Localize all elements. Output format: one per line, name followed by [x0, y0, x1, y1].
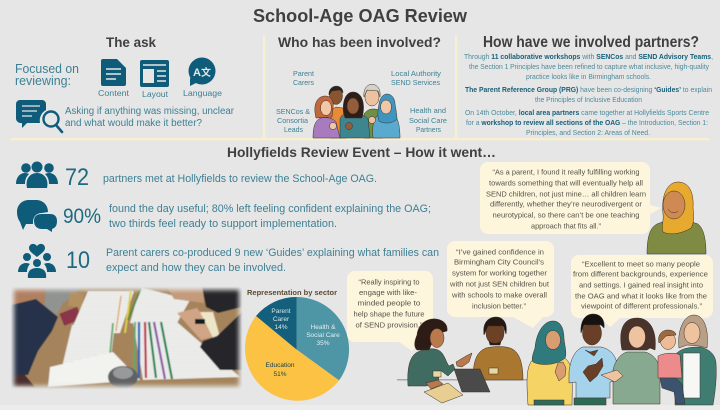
- description: two thirds feel ready to support implementation.: [109, 218, 337, 230]
- slice labels: Parent: [271, 308, 291, 315]
- icon: content: [101, 59, 126, 86]
- partner labels: Leads: [284, 125, 303, 134]
- text: asking: and what would make it better?: [65, 118, 202, 129]
- stat: 90 percent: [17, 200, 431, 232]
- woman teal: [340, 92, 370, 138]
- quote text: towards something that will eventually help all: [489, 178, 643, 188]
- quote text: [449, 248, 549, 310]
- chart: representation by sector pie: [245, 288, 349, 401]
- icon labels: Layout: [142, 90, 169, 99]
- partner labels: SENCos &: [276, 107, 310, 116]
- quote text: “Excellent to meet so many people: [582, 260, 700, 268]
- woman purple: [313, 96, 340, 138]
- chart title: Representation by sector: [247, 288, 337, 297]
- quote text: with schools to make overall: [451, 290, 547, 300]
- back man orange: [329, 86, 346, 138]
- quote text: inclusion better.”: [472, 302, 527, 310]
- quote text: “Really inspiring to: [358, 278, 420, 286]
- paragraph: workshops: practice looks like in Birmingham schools.: [526, 72, 651, 81]
- partner labels: Parent: [293, 69, 315, 78]
- partner labels: Consortia: [277, 116, 309, 125]
- person: man with lanyard: [473, 317, 523, 380]
- quote text: engage with like-: [359, 288, 418, 297]
- person: child: [658, 330, 685, 404]
- slice labels: 14%: [274, 324, 288, 331]
- icon: speech bubbles: [17, 200, 57, 232]
- icon labels: Language: [183, 89, 223, 98]
- slice labels: 51%: [273, 371, 287, 378]
- slice labels: Health &: [311, 324, 336, 331]
- quote text: Birmingham City Council’s: [454, 258, 544, 266]
- panel: the ask: [15, 34, 235, 132]
- slice labels: Carer: [273, 316, 290, 323]
- title: School-Age OAG Review: [253, 6, 468, 26]
- quote text: neurotypical, so there can’t be one teaching: [492, 210, 640, 220]
- partner labels: Partners: [416, 125, 441, 134]
- panel: how have we involved partners: [464, 34, 713, 137]
- laptop and paper: [424, 369, 490, 403]
- stat: 10 parent carers: [18, 244, 439, 278]
- stat: 72 partners: [16, 162, 377, 191]
- number: 90%: [63, 205, 101, 228]
- quote text: “As a parent, I found it really fulfilling working: [492, 168, 640, 176]
- text: asking: [65, 106, 235, 129]
- icon: chat and magnifier: [16, 100, 62, 132]
- slice: parent carer 14%: [256, 297, 296, 350]
- illustration: parent in hijab: [647, 182, 706, 254]
- quote text: [486, 168, 646, 230]
- quote text: from different backgrounds, experience: [573, 270, 708, 278]
- slice: health and social care 35%: [296, 297, 349, 380]
- quote text: system for working together: [452, 268, 548, 278]
- person: man in blue: [569, 314, 617, 405]
- icon labels: Content: [98, 89, 130, 98]
- icon: people: [16, 162, 58, 188]
- paragraph: workshops: [464, 52, 713, 81]
- paragraph: 14th october: On 14th October, local area partners came together at Hollyfields Sports Centre: [465, 108, 709, 117]
- partner labels: [276, 69, 447, 134]
- text: focused on reviewing: [15, 61, 79, 88]
- paragraph: parent reference group: The Parent Reference Group (PRG) have been co-designing ‘Guides’ to explain: [465, 85, 712, 94]
- description: expect and how they can be involved.: [106, 262, 286, 274]
- partner labels: Social Care: [409, 116, 447, 125]
- text: focused on reviewing: reviewing:: [15, 73, 71, 88]
- heading: who: Who has been involved?: [278, 34, 441, 50]
- paragraph: 14th october: Principles, and Section 2: Areas of Need.: [526, 128, 650, 137]
- text: focused on reviewing: Focused on: [15, 61, 79, 76]
- quote text: help shape the future: [354, 310, 424, 318]
- description: Parent carers co-produced 9 new ‘Guides’ explaining what families can: [106, 247, 439, 259]
- quote text: SEND children, not just mine… all children learn: [486, 190, 646, 198]
- icon: language: [188, 58, 216, 86]
- person: woman in hijab: [527, 321, 572, 405]
- quote text: [573, 260, 708, 310]
- back man grey hair: [364, 84, 383, 138]
- photo: workshop table with documents: [11, 287, 242, 389]
- quote text: differently, whether they’re neurodivergent or: [490, 200, 643, 208]
- paragraph: 14th october: for a workshop to review all sections of the OAG – the Introduction, Section 1:: [466, 118, 708, 127]
- person: woman holding child: [675, 315, 716, 405]
- quote text: and settings. I gained real insight into: [579, 280, 703, 290]
- partner labels: Carers: [293, 78, 314, 87]
- description: [106, 247, 439, 274]
- partner labels: Health and: [410, 106, 446, 115]
- quote: inspiring: [347, 271, 433, 351]
- person: woman in green shirt: [601, 318, 660, 404]
- bubble: [347, 271, 433, 351]
- heading: hollyfields: Hollyfields Review Event – How it went…: [227, 144, 496, 160]
- description: [109, 203, 431, 230]
- slice labels: [266, 308, 340, 378]
- table line: [397, 379, 527, 380]
- quote: excellent: [571, 255, 713, 327]
- quote: confidence: [447, 241, 554, 328]
- quote text: “I’ve gained confidence in: [456, 248, 544, 256]
- description: partners met at Hollyfields to review the School-Age OAG.: [103, 173, 377, 185]
- paragraph: workshops: Through 11 collaborative workshops with SENCos and SEND Advisory Teams,: [464, 52, 713, 61]
- partner labels: Local Authority: [391, 69, 441, 78]
- quote text: of SEND provision.”: [356, 320, 423, 330]
- quote text: [354, 278, 424, 330]
- text: asking: Asking if anything was missing, unclear: [65, 106, 235, 117]
- slice labels: Social Care: [306, 332, 340, 339]
- icon: language: 文: [201, 66, 211, 79]
- bubble: [447, 241, 554, 328]
- quote text: with not just SEN children but: [449, 280, 549, 288]
- heading: the ask: The ask: [106, 34, 156, 50]
- slice labels: Education: [266, 362, 295, 369]
- slice: education 51%: [245, 316, 339, 401]
- bubble: [480, 162, 661, 234]
- partner labels: SEND Services: [391, 78, 440, 87]
- person: woman with lanyard: [408, 319, 472, 389]
- quote text: viewpoint of different professionals.”: [581, 302, 703, 310]
- number: 72: [65, 164, 89, 191]
- icon labels: [98, 89, 223, 99]
- quote text: approach that fits all.”: [531, 222, 602, 230]
- bubble: [571, 255, 713, 327]
- quote text: the OAG and what it looks like from the: [575, 292, 707, 300]
- paragraph: parent reference group: [465, 85, 712, 104]
- illustration: group of people: [313, 84, 400, 138]
- paragraph: parent reference group: the Principles of Inclusive Education: [535, 95, 642, 104]
- icon: language: A: [193, 67, 201, 79]
- quote text: minded people to: [358, 298, 420, 308]
- icon: layout: [140, 60, 169, 87]
- panel: who has been involved: [276, 34, 447, 138]
- number: 10: [66, 247, 90, 274]
- woman blue hijab: [368, 94, 400, 138]
- illustration: people at bottom: [397, 314, 716, 405]
- slice labels: 35%: [316, 340, 330, 347]
- quote: parent: [480, 162, 706, 254]
- icon: family heart: [18, 244, 56, 278]
- paragraph: 14th october: [465, 108, 709, 137]
- description: found the day useful; 80% left feeling confident explaining the OAG;: [109, 203, 431, 215]
